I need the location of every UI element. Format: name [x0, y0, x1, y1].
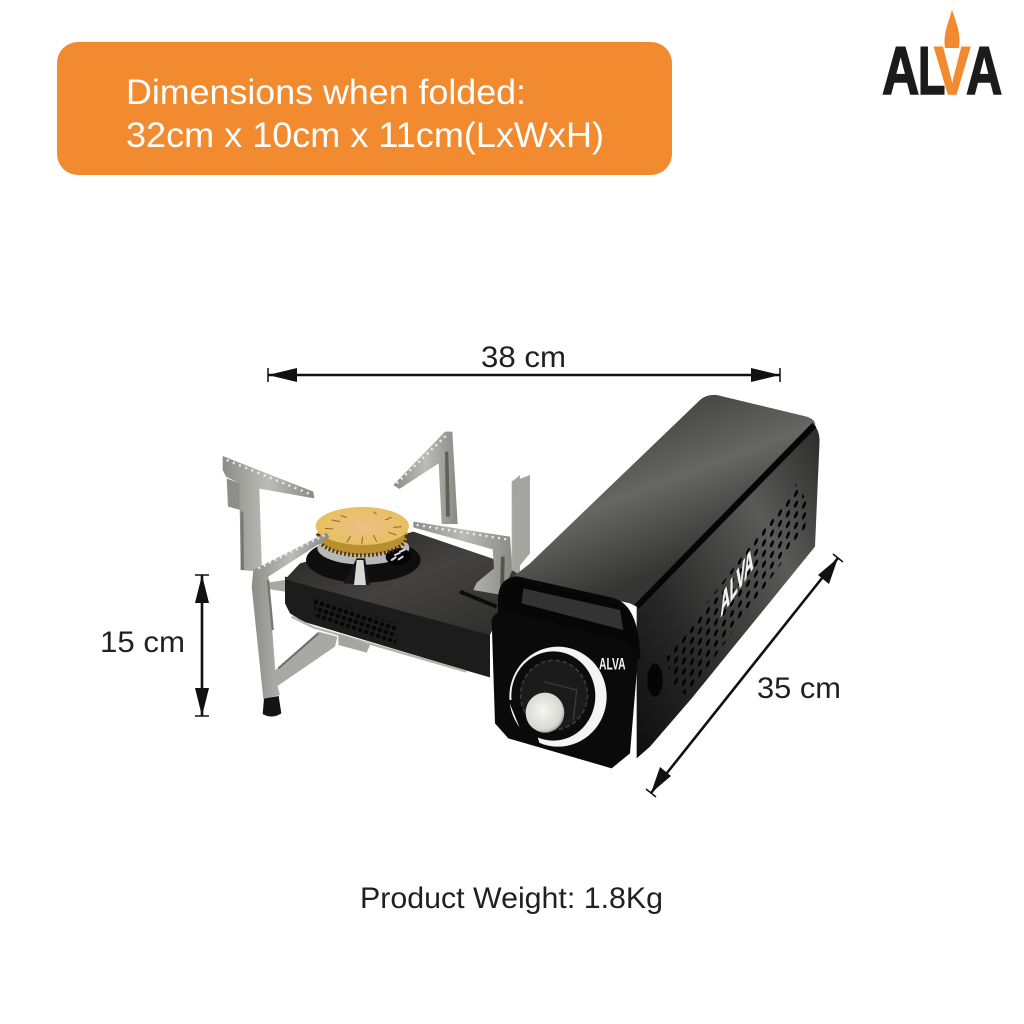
dimension: height 15 cm: 15 cm	[100, 626, 185, 659]
stove top plate	[285, 532, 520, 635]
underside bracket	[338, 633, 370, 653]
OFF label: OFF	[549, 650, 559, 656]
knob	[521, 660, 587, 733]
lock handle	[500, 578, 638, 657]
dimension: height 15 cm	[100, 575, 209, 716]
front panel	[492, 610, 638, 768]
cartridge port	[647, 663, 663, 697]
text: folded dimensions	[126, 73, 604, 155]
front panel logo: ALVA	[599, 654, 626, 673]
back left pot support	[223, 456, 314, 592]
dimension: depth 35 cm	[646, 554, 843, 797]
underside silver strip	[292, 617, 467, 672]
folded stove plate, front face	[285, 577, 490, 677]
knob button	[526, 693, 564, 733]
text: folded dimensions: 32cm x 10cm x 11cm(LxWxH)	[126, 116, 604, 155]
side ventilation holes	[663, 480, 810, 700]
glossy edge	[637, 425, 814, 607]
logo: ALVA: L	[918, 34, 945, 109]
logo: ALVA	[882, 10, 1002, 109]
dial ring gap	[508, 700, 540, 745]
panel: folded dimensions banner	[57, 42, 672, 175]
logo: ALVA: A	[882, 32, 919, 109]
logo: ALVA: A	[966, 33, 1002, 109]
text: product weight: Product Weight: 1.8Kg	[360, 882, 663, 915]
stove left part: burner, plate and legs	[223, 432, 520, 717]
logo: ALVA: V	[934, 33, 970, 109]
rubber foot	[263, 696, 281, 717]
illustration: camping stove	[223, 395, 820, 768]
column behind housing	[512, 475, 530, 572]
dimension: depth 35 cm: 35 cm	[757, 672, 841, 705]
housing top face	[513, 395, 815, 607]
cartridge housing	[492, 395, 820, 768]
text: folded dimensions: Dimensions when folded:	[126, 73, 526, 112]
front vents	[314, 600, 396, 643]
front left pot support and leg	[252, 533, 337, 699]
side logo: ALVA	[721, 539, 753, 624]
right pot support	[413, 475, 520, 607]
dimension: width 38 cm: 38 cm	[481, 341, 566, 374]
housing side face	[637, 425, 820, 758]
back right pot support	[393, 432, 458, 524]
burner	[306, 507, 421, 585]
dial ring	[509, 647, 607, 747]
dimension: width 38 cm	[268, 341, 780, 382]
